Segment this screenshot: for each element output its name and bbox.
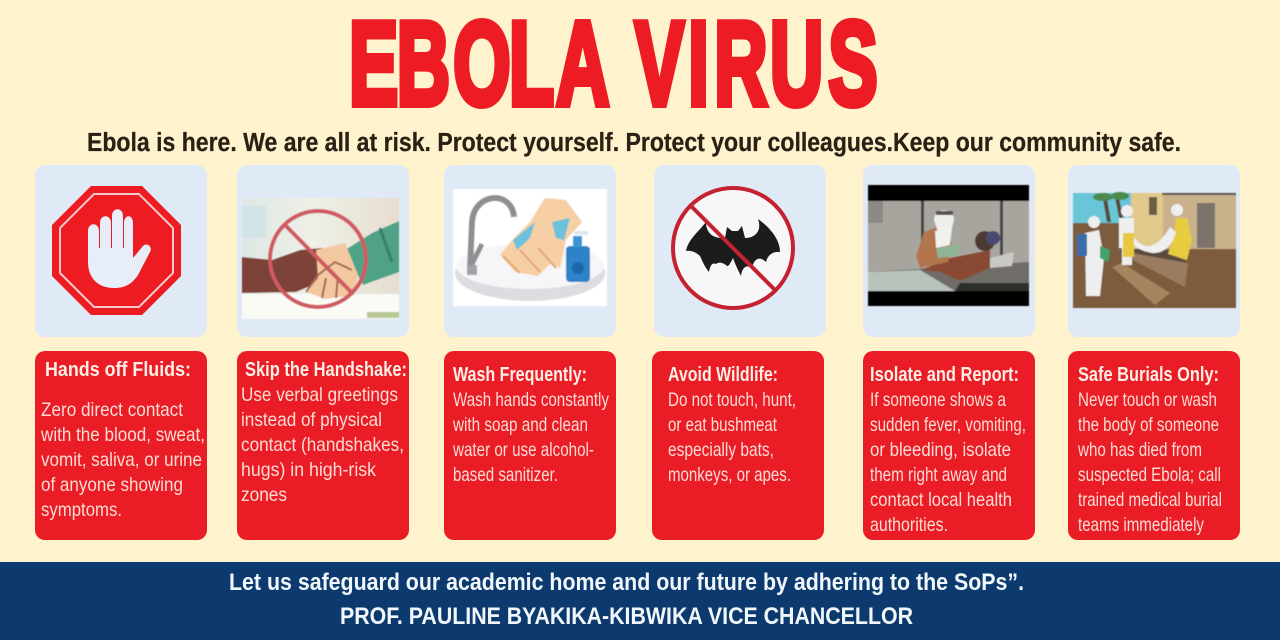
subtitle: Ebola is here. We are all at risk. Protect yourself. Protect your colleagues.Keep our community safe.: [87, 129, 1181, 157]
card: safe burials only: suspected Ebola; call: [1078, 464, 1221, 486]
card: safe burials only: trained medical burial: [1078, 489, 1222, 511]
card: hands off fluids: of anyone showing: [41, 474, 183, 496]
card: isolate and report: or bleeding, isolate: [870, 439, 1011, 461]
card: isolate and report: contact local health: [870, 489, 1012, 511]
card: skip the handshake: instead of physical: [241, 409, 382, 431]
icon: no handshake: [242, 198, 399, 319]
panel: safe burial image: [1068, 165, 1240, 337]
icon: burial team: [1073, 192, 1236, 308]
card: skip the handshake: [237, 351, 409, 540]
icon: hands washing at sink: [453, 189, 607, 306]
card: isolate and report: them right away and: [870, 464, 1007, 486]
card: isolate and report: authorities.: [870, 514, 948, 536]
title: EBOLA VIRUS: [349, 0, 878, 130]
card: hands off fluids: with the blood, sweat,: [40, 424, 205, 446]
card: isolate and report: [863, 351, 1035, 540]
footer message: Let us safeguard our academic home and our future by adhering to the SoPs”.: [229, 569, 1024, 596]
card: safe burials only: Never touch or wash: [1078, 389, 1217, 411]
panel: stop hand image: [35, 165, 207, 337]
panel: hand washing image: [444, 165, 616, 337]
footer band: [0, 562, 1280, 640]
icon: stop sign with hand: [52, 186, 181, 315]
card: hands off fluids: symptoms.: [41, 499, 122, 521]
card: hands off fluids: [35, 351, 207, 540]
footer attribution: PROF. PAULINE BYAKIKA-KIBWIKA VICE CHANCELLOR: [340, 603, 913, 630]
panel: handshake image: [237, 165, 409, 337]
card: skip the handshake: zones: [241, 484, 287, 506]
card: avoid wildlife: [652, 351, 824, 540]
card: wash frequently: Wash Frequently:: [453, 364, 587, 386]
card: safe burials only: the body of someone: [1078, 414, 1219, 436]
card: avoid wildlife: especially bats,: [668, 439, 774, 461]
card: avoid wildlife: Do not touch, hunt,: [668, 389, 796, 411]
card: skip the handshake: Use verbal greetings: [241, 384, 398, 406]
card: safe burials only: [1068, 351, 1240, 540]
card: avoid wildlife: Avoid Wildlife:: [668, 364, 778, 386]
card: skip the handshake: Skip the Handshake:: [245, 359, 407, 381]
icon: health worker with patient: [868, 185, 1029, 306]
card: avoid wildlife: monkeys, or apes.: [668, 464, 791, 486]
card: wash frequently: water or use alcohol-: [452, 439, 594, 461]
card: avoid wildlife: or eat bushmeat: [668, 414, 777, 436]
panel: isolate image: [863, 165, 1035, 337]
card: safe burials only: Safe Burials Only:: [1078, 364, 1219, 386]
card: safe burials only: who has died from: [1077, 439, 1202, 461]
card: safe burials only: teams immediately: [1078, 514, 1204, 536]
card: wash frequently: Wash hands constantly: [453, 389, 609, 411]
card: skip the handshake: hugs) in high-risk: [241, 459, 376, 481]
card: skip the handshake: contact (handshakes,: [241, 434, 404, 456]
card: wash frequently: [444, 351, 616, 540]
icon: no bats: [673, 188, 793, 308]
card: wash frequently: with soap and clean: [452, 414, 588, 436]
panel: avoid wildlife image: [654, 165, 826, 337]
card: hands off fluids: Zero direct contact: [41, 399, 184, 421]
card: isolate and report: sudden fever, vomiting,: [870, 414, 1026, 436]
card: hands off fluids: Hands off Fluids:: [45, 359, 191, 381]
card: isolate and report: If someone shows a: [870, 389, 1006, 411]
card: isolate and report: Isolate and Report:: [870, 364, 1019, 386]
card: wash frequently: based sanitizer.: [453, 464, 558, 486]
card: hands off fluids: vomit, saliva, or urine: [41, 449, 202, 471]
